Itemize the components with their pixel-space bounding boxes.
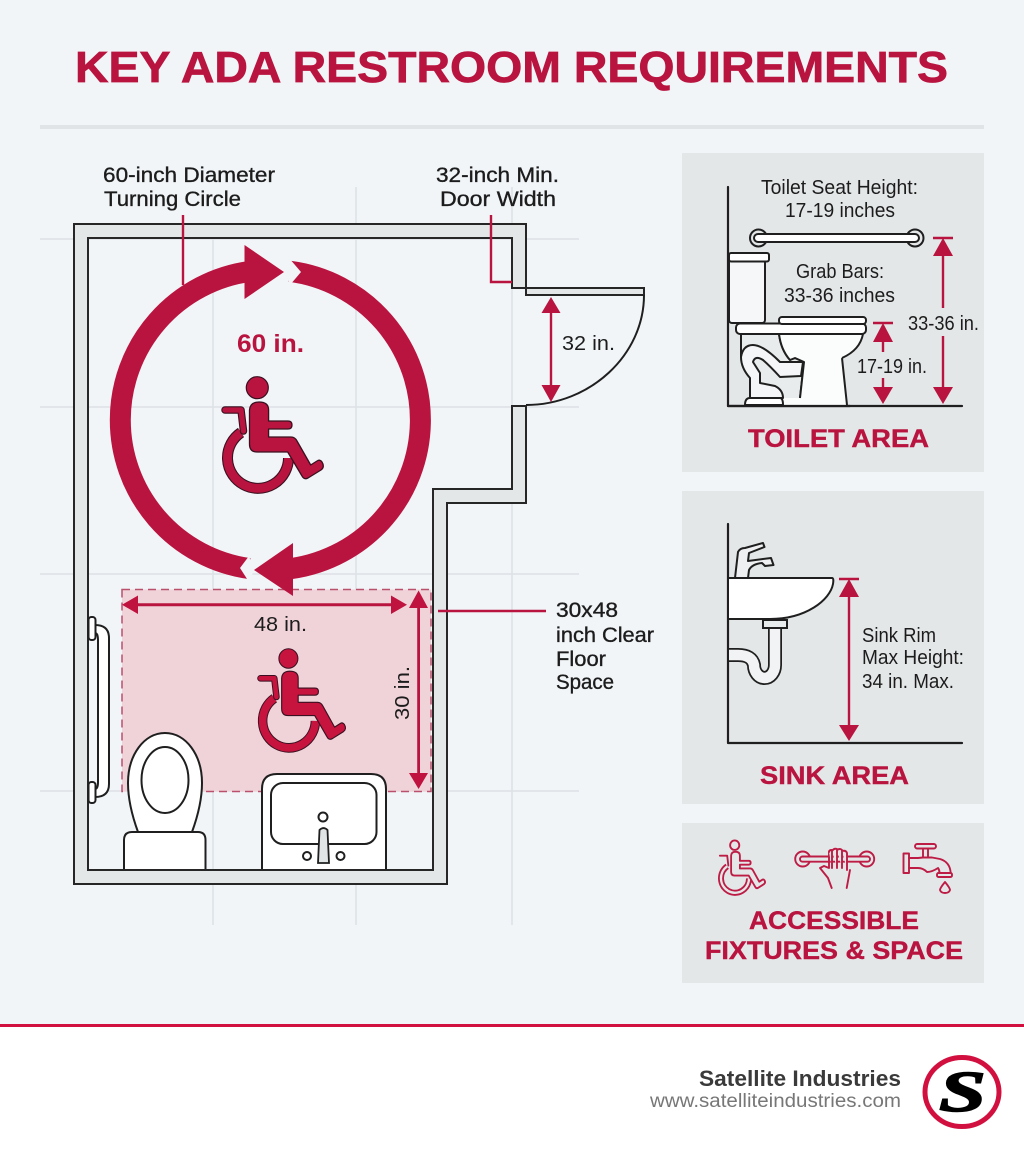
- sink plan view: [262, 774, 386, 870]
- arrow: seat height: [873, 323, 893, 404]
- door width dimension: 32 in.: [562, 333, 615, 355]
- 48 inch arrow: [122, 596, 407, 614]
- callout: door width: 32-inch Min.: [436, 164, 559, 187]
- panel: floor plan: [74, 224, 644, 884]
- icon: hand on grab bar: [795, 849, 874, 888]
- arrow: sink rim height: [839, 579, 859, 741]
- icon: wheelchair outline: [720, 840, 765, 893]
- company name: Satellite Industries: [699, 1066, 901, 1091]
- footer: [0, 1024, 1024, 1154]
- panel: toilet area: [682, 153, 984, 472]
- icon: wheelchair in turning circle: [225, 377, 323, 488]
- callout: clear floor space: Floor: [556, 648, 606, 671]
- side grab bar: [750, 230, 924, 246]
- toilet plan view: [124, 733, 206, 870]
- arrow: grab bar height: [933, 238, 953, 404]
- sink wall and floor: [728, 524, 962, 743]
- 48 inch label: 48 in.: [254, 614, 307, 636]
- faucet: [735, 543, 774, 578]
- fixtures heading: FIXTURES & SPACE: [705, 937, 963, 965]
- sink basin: [728, 578, 833, 619]
- drain pipe: [729, 620, 787, 678]
- seat height label: 17-19 in.: [857, 356, 927, 378]
- sink area heading: SINK AREA: [760, 762, 909, 790]
- sink rim label: 34 in. Max.: [862, 671, 954, 693]
- door width arrow: [542, 297, 560, 402]
- icon: wheelchair in clear floor space: [260, 649, 345, 748]
- icon: dripping tap: [904, 844, 952, 893]
- company logo: S: [939, 1059, 986, 1124]
- callout: clear floor space: 30x48: [556, 599, 618, 622]
- fixtures heading: ACCESSIBLE: [749, 907, 919, 935]
- sink rim label: Max Height:: [862, 647, 964, 669]
- toilet labels: Toilet Seat Height:: [761, 177, 918, 199]
- sink rim label: [862, 625, 964, 693]
- fixtures heading: [705, 907, 963, 965]
- toilet labels: 33-36 inches: [784, 285, 895, 307]
- callout: turning circle: Turning Circle: [104, 188, 241, 211]
- toilet labels: 17-19 inches: [785, 200, 895, 222]
- callout: clear floor space: [438, 599, 654, 694]
- clear floor space zone: [122, 590, 431, 792]
- callout: clear floor space: Space: [556, 671, 614, 694]
- callout: turning circle: [103, 164, 275, 285]
- callout: door width: Door Width: [440, 188, 556, 211]
- panel: sink area: [682, 491, 984, 804]
- callout: turning circle: 60-inch Diameter: [103, 164, 275, 187]
- grab bar height label: 33-36 in.: [908, 313, 979, 335]
- company website: www.satelliteindustries.com: [649, 1091, 901, 1112]
- wall grab bar: [88, 617, 109, 803]
- callout: clear floor space: inch Clear: [556, 624, 654, 647]
- 30 inch label: 30 in.: [392, 666, 414, 720]
- callout: door width: [436, 164, 559, 282]
- turning circle arrows: [120, 245, 420, 596]
- toilet area heading: TOILET AREA: [748, 425, 929, 453]
- toilet labels: [761, 177, 918, 307]
- circle dimension: 60 in.: [237, 330, 304, 358]
- panel: accessible fixtures: [682, 823, 984, 983]
- sink rim label: Sink Rim: [862, 625, 936, 647]
- toilet wall and floor: [728, 187, 962, 406]
- company logo: [925, 1058, 999, 1126]
- walls: [74, 224, 644, 884]
- toilet labels: Grab Bars:: [796, 261, 884, 283]
- toilet side view: [728, 253, 866, 406]
- 30 inch arrow: [409, 590, 428, 789]
- title: KEY ADA RESTROOM REQUIREMENTS: [75, 43, 948, 92]
- door swing arc: [526, 295, 644, 405]
